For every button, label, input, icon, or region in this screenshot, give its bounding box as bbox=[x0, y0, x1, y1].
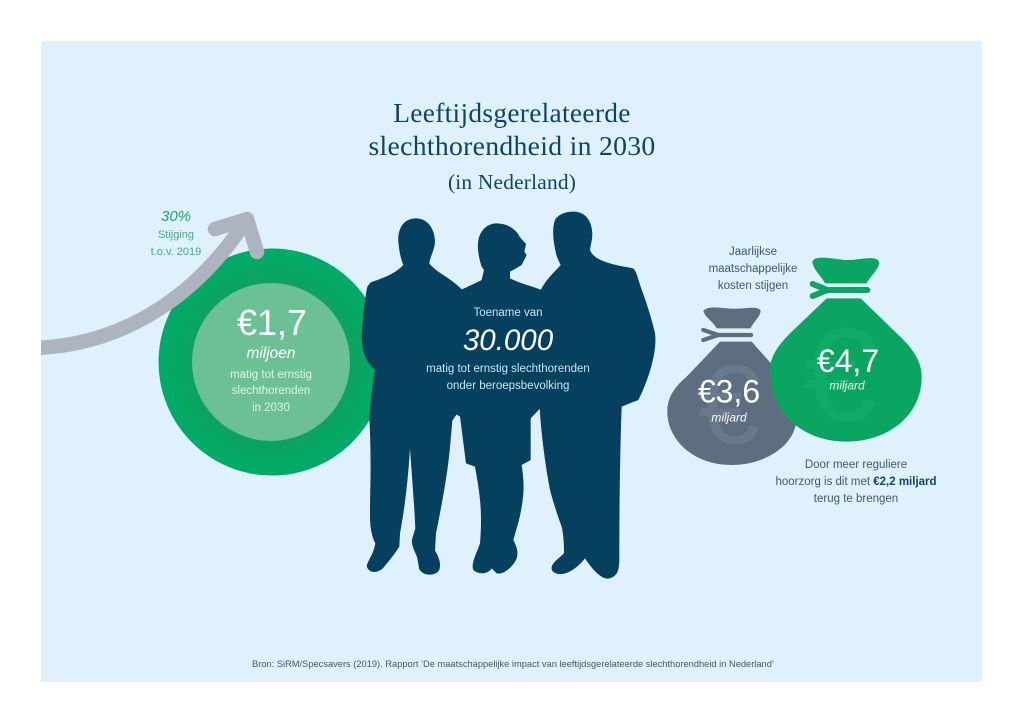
silhouette: woman bbox=[453, 223, 548, 574]
arrow label: 30% increase: t.o.v. 2019 bbox=[151, 246, 201, 258]
green circle: 1.7 million: slechthorenden bbox=[232, 385, 310, 397]
green circle: 1.7 million: miljoen bbox=[246, 345, 296, 362]
silhouette text: 30,000 increase bbox=[426, 307, 590, 392]
title: Leeftijdsgerelateerde bbox=[393, 98, 631, 128]
silhouette text: 30,000 increase: onder beroepsbevolking bbox=[447, 380, 569, 392]
title: (in Nederland) bbox=[448, 170, 576, 194]
silhouettes of three people bbox=[362, 212, 655, 579]
green money bag: 4.7 billion bbox=[770, 258, 922, 450]
savings note bbox=[775, 459, 937, 505]
green circle: 1.7 million bbox=[158, 248, 386, 476]
green money bag: 4.7 billion: miljard bbox=[829, 378, 865, 392]
arrow: rising trend bbox=[35, 219, 257, 348]
silhouette: right man bbox=[537, 212, 655, 579]
title: slechthorendheid in 2030 bbox=[368, 130, 656, 161]
savings note: terug te brengen bbox=[814, 493, 898, 505]
arrow label: 30% increase bbox=[151, 208, 201, 258]
costs label: kosten stijgen bbox=[718, 280, 788, 292]
costs label: Jaarlijkse bbox=[729, 246, 777, 258]
title bbox=[368, 98, 656, 194]
green circle: 1.7 million: in 2030 bbox=[252, 402, 290, 414]
arrow label: 30% increase: 30% bbox=[161, 208, 191, 225]
grey money bag: 3.6 billion: €3,6 bbox=[698, 374, 760, 410]
source line: Bron: SiRM/Specsavers (2019). Rapport ‘De maatschappelijke impact van leeftijdsgerelateerde slechthorendheid in Nederland’ bbox=[252, 659, 774, 669]
green circle: 1.7 million: matig tot ernstig bbox=[230, 369, 312, 381]
savings note: hoorzorg is dit met €2,2 miljard bbox=[775, 476, 937, 488]
grey money bag: 3.6 billion bbox=[667, 307, 797, 468]
green money bag: 4.7 billion: €4,7 bbox=[817, 343, 879, 379]
green circle: 1.7 million: €1,7 bbox=[237, 302, 307, 343]
silhouette text: 30,000 increase: Toename van bbox=[473, 307, 543, 319]
silhouette: left man bbox=[362, 218, 468, 575]
grey money bag: 3.6 billion: miljard bbox=[711, 410, 747, 424]
savings note: Door meer reguliere bbox=[805, 459, 907, 471]
silhouette text: 30,000 increase: matig tot ernstig slechthorenden bbox=[426, 363, 590, 375]
grey money bag: 3.6 billion: € bbox=[697, 341, 761, 468]
silhouette text: 30,000 increase: 30.000 bbox=[463, 324, 554, 357]
green money bag: 4.7 billion: € bbox=[803, 301, 877, 450]
costs label: maatschappelijke bbox=[709, 263, 797, 275]
arrow label: 30% increase: Stijging bbox=[158, 229, 194, 241]
costs label bbox=[709, 246, 797, 292]
